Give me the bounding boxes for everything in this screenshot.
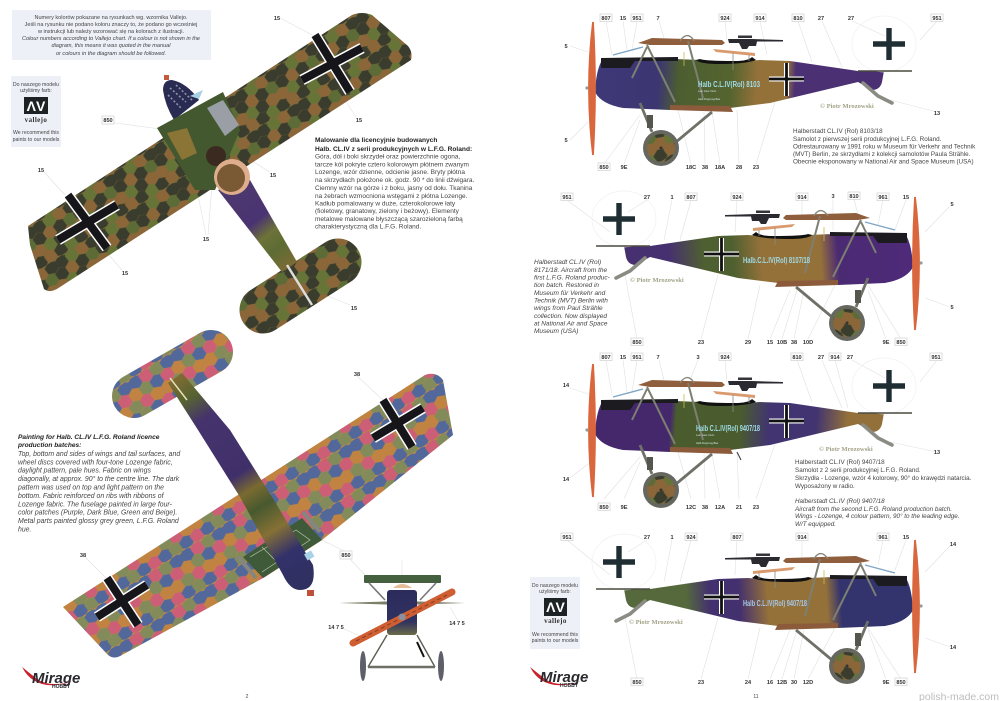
caption 9407/18: Aircraft from the second L.F.G. Roland production batch.: [794, 506, 952, 513]
caption 9407/18: Skrzydła - Lozenge, wzór 4 kolorowy, 90° do krawędzi natarcia.: [795, 474, 972, 482]
vallejo recommendation panel: paints to our models: [13, 137, 60, 143]
colour note panel: Numery kolorów pokazane na rysunkach wg. wzornika Vallejo.: [34, 15, 188, 21]
side view 2 colour labels: 914: [797, 195, 808, 201]
side view 4 colour labels: 12D: [803, 680, 813, 686]
fuselage: [218, 180, 297, 272]
side view 2 colour labels: 5: [950, 305, 954, 311]
english painting text: diagonally, at approx. 90° to the centre line. The dark: [18, 475, 180, 483]
page number right: 11: [753, 694, 759, 700]
english painting text: [17, 434, 181, 534]
top view colour labels: [38, 16, 362, 312]
vallejo recommendation panel: [11, 76, 61, 147]
caption 9407/18: Halberstadt CL.IV (Rol) 9407/18: [795, 498, 885, 505]
upper wing: [28, 13, 412, 291]
side view 2 colour labels: 15: [903, 195, 909, 201]
lower wing: [63, 374, 453, 658]
front view colour labels: 14 7 5: [449, 621, 465, 627]
bottom view colour labels: 38: [80, 553, 86, 559]
side view 2 colour labels: 27: [644, 195, 650, 201]
side view 3 colour labels: 27: [847, 355, 853, 361]
side view 1 colour labels: 23: [753, 165, 759, 171]
page number left: 2: [246, 694, 249, 700]
side view 3 colour labels: 12C: [686, 505, 696, 511]
side view 2 colour labels: 1: [670, 195, 674, 201]
side view 1 colour labels: 15: [620, 16, 626, 22]
vallejo recommendation panel right: ΛV: [546, 599, 565, 615]
polish painting text: (fioletowy, granatowy, zielony i beżowy). Elementy: [315, 208, 460, 215]
colour note panel: Colour numbers according to Vallejo chart. If a colour is not shown in the: [22, 36, 200, 42]
colour note panel: w instrukcji lub należy wzorować się na kolorach z ilustracji.: [37, 29, 185, 35]
side view 2 colour labels: 15: [767, 340, 773, 346]
side view 2 colour labels: 810: [849, 194, 859, 200]
polish painting text: Lozenge, wzór dzienne, odcienie jasne. Bryty płótna: [315, 169, 465, 176]
engine cowling: [163, 75, 203, 120]
vallejo recommendation panel: We recommend this: [13, 130, 59, 136]
bottom view colour labels: [80, 372, 360, 559]
side view 3: 9407/18: Halb.Flugzeug-Bau: [696, 441, 719, 445]
top view plane: dark lozenge: [28, 13, 412, 310]
side view 2 colour labels: [561, 192, 954, 346]
vallejo recommendation panel: Do naszego modelu: [13, 82, 59, 88]
side view 4 colour labels: 15: [903, 535, 909, 541]
top view colour labels: 15: [356, 118, 362, 124]
side view 1 colour labels: 27: [818, 16, 824, 22]
side view 2 colour labels: 29: [745, 340, 751, 346]
side view 2 colour labels: 23: [698, 340, 704, 346]
vallejo recommendation panel right: paints to our models: [532, 638, 579, 644]
english painting text: Lozenge fabric. The fuselage painted in large four-: [18, 502, 173, 508]
polish painting text: na żebrach wzmocniona wstęgami z płótna Lozenge.: [315, 193, 468, 200]
side view 4: 9407/18: [567, 534, 950, 684]
side view 1 colour labels: 38: [702, 165, 708, 171]
side view 3 colour labels: 9E: [621, 505, 628, 511]
polish painting text: Malowanie dla licencyjnie budowanych: [315, 137, 437, 144]
caption 8171/18: Technik (MVT) Berlin with: [534, 298, 608, 304]
side view 3 colour labels: 7: [656, 355, 660, 361]
side view 1: 8103/18: Halb.Flugzeug-Bau: [698, 97, 721, 101]
side view 1 colour labels: 18C: [686, 165, 696, 171]
side view 2 colour labels: 807: [686, 195, 696, 201]
side view 3 colour labels: 23: [753, 505, 759, 511]
side view 4 colour labels: 807: [732, 535, 742, 541]
vallejo recommendation panel right: vallejo: [544, 617, 567, 625]
caption 8171/18: [534, 259, 611, 335]
caption 8103/18: [793, 128, 976, 166]
side view 1 colour labels: 5: [564, 138, 568, 144]
side view 4 colour labels: 23: [698, 680, 704, 686]
caption 9407/18: Wyposażony w radio.: [795, 483, 855, 490]
caption 8171/18: first L.F.G. Roland produc-: [534, 274, 611, 282]
side view 1 colour labels: 924: [720, 16, 731, 22]
side view 4 colour labels: 30: [791, 680, 797, 686]
side view 4 colour labels: 914: [797, 535, 808, 541]
top view colour labels: 15: [203, 237, 209, 243]
tailplane: [263, 262, 338, 310]
centre section: [243, 518, 322, 578]
side view 1: 8103/18: Halb C.L.IV(Rol) 8103: [698, 80, 760, 89]
side view 3 colour labels: 807: [601, 355, 611, 361]
side view 1 colour labels: [564, 14, 943, 171]
side view 1 colour labels: 5: [564, 44, 568, 50]
caption 8103/18: Halberstadt CL.IV (Rol) 8103/18: [793, 128, 883, 135]
english painting text: pattern was used on top and light pattern on the: [17, 484, 164, 492]
side view 4 colour labels: 924: [686, 535, 697, 541]
side view 4 colour labels: 27: [644, 535, 650, 541]
fuselage: [168, 373, 314, 590]
polish painting text: na skrzydłach położone ok. godz. 90 * do linii dźwigara.: [315, 177, 475, 184]
side view 3 colour labels: 27: [818, 355, 824, 361]
vallejo recommendation panel right: Do naszego modelu: [532, 583, 578, 589]
front view colour labels: [328, 621, 465, 631]
caption 8103/18: (MVT) Berlin, ze skrzydłami z kolekcji samolotów Paula Strähle.: [793, 151, 971, 158]
side view 3 colour labels: 951: [632, 355, 642, 361]
mirage logo right: Mirage: [540, 669, 588, 686]
side view 3 colour labels: 850: [599, 505, 609, 511]
caption 9407/18: Samolot z 2 serii produkcyjnej L.F.G. Roland.: [795, 467, 921, 474]
side view 2: 8171/18: © Piotr Mrozowski: [630, 277, 684, 284]
wing crosses: [58, 35, 362, 248]
side view 2: 8171/18: [567, 191, 950, 341]
side view 4 colour labels: 1: [670, 535, 674, 541]
side view 3: 9407/18: Leer Gew. Nutz.: [696, 433, 715, 437]
vallejo recommendation panel: użyliśmy farb:: [20, 88, 52, 94]
side view 4: 9407/18: © Piotr Mrozowski: [629, 619, 683, 626]
side view 4 colour labels: 951: [562, 535, 572, 541]
english painting text: daylight pattern, pale hues. Fabric on wings: [18, 468, 151, 474]
side view 3: 9407/18: [570, 358, 937, 508]
side view 4 colour labels: 12B: [777, 680, 787, 686]
side view 2 colour labels: 9E: [883, 340, 890, 346]
top view colour labels: 15: [351, 306, 357, 312]
english painting text: Metal parts painted glossy grey green, L.F.G. Roland: [18, 518, 180, 525]
side view 3 colour labels: 14: [563, 477, 570, 483]
side view 4 colour labels: 14: [950, 542, 957, 548]
vallejo recommendation panel right: użyliśmy farb:: [539, 589, 571, 595]
side view 2 colour labels: 850: [632, 340, 642, 346]
bottom view colour labels: 850: [341, 553, 351, 559]
side view 2 colour labels: 850: [896, 340, 906, 346]
side view 1 colour labels: 951: [632, 16, 642, 22]
english painting text: Painting for Halb. CL.IV L.F.G. Roland licence: [18, 434, 160, 441]
centre section: [157, 92, 240, 190]
caption 8103/18: Odrestaurowany w 1991 roku w Museum für Verkehr and Technik: [793, 144, 976, 150]
mirage logo left: [22, 667, 80, 690]
side view 3 colour labels: 810: [792, 355, 802, 361]
tailplane: [134, 352, 211, 396]
colour note panel: [12, 10, 211, 60]
english painting text: production batches:: [17, 442, 81, 449]
front view colour labels: 14 7 5: [328, 625, 344, 631]
side view 1: 8103/18: © Piotr Mrozowski: [820, 103, 874, 110]
mirage logo right: HOBBY: [560, 683, 579, 689]
english painting text: color patches (Purple, Dark Blue, Green and Beige).: [18, 510, 177, 516]
side view 4: 9407/18: Halb C.L.IV(Rol) 9407/18: [743, 599, 807, 608]
caption 8171/18: collection. Now displayed: [534, 313, 607, 320]
side view 1 colour labels: 18A: [715, 165, 725, 171]
side view 2: 8171/18: Halb.C.L.IV(Rol) 8107/18: [743, 256, 810, 265]
caption 8171/18: Museum (USA): [534, 328, 578, 335]
side view 1 colour labels: 807: [601, 16, 611, 22]
side view 4 colour labels: 24: [745, 680, 752, 686]
side view 2 colour labels: 951: [562, 195, 572, 201]
caption 8171/18: Museum für Verkehr and: [534, 290, 606, 297]
side view 3: 9407/18: © Piotr Mrozowski: [819, 446, 873, 453]
polish painting text: Góra, dół i boki skrzydeł oraz powierzchnie ogona,: [315, 154, 460, 160]
side view 1: 8103/18: Leer Gew. Nutz.: [698, 89, 717, 93]
vallejo recommendation panel right: We recommend this: [532, 632, 578, 638]
side view 3 colour labels: 38: [702, 505, 708, 511]
side view 1 colour labels: 28: [736, 165, 742, 171]
bottom view colour labels: 38: [354, 372, 360, 378]
top view colour labels: 850: [103, 118, 113, 124]
side view 3 colour labels: 21: [736, 505, 742, 511]
side view 3 colour labels: 951: [931, 355, 941, 361]
side view 3 colour labels: 914: [830, 355, 841, 361]
side view 2 colour labels: 38: [791, 340, 797, 346]
polish painting text: [315, 137, 475, 230]
polish painting text: Kadłub pomalowany w duże, czterokolorowe łaty: [315, 200, 456, 208]
polish painting text: tarcze kół pokryte cztero kolorowym płótnem zwanym: [315, 162, 469, 168]
side view 2 colour labels: 3: [831, 194, 835, 200]
front view plane: [339, 558, 465, 681]
top view colour labels: 15: [38, 168, 44, 174]
side view 4 colour labels: 14: [950, 645, 957, 651]
side view 3 colour labels: 13: [934, 450, 940, 456]
wing crosses: [97, 400, 423, 625]
caption 9407/18: Wings - Lozenge, 4 colour pattern, 90° to the leading edge.: [795, 512, 960, 520]
side view 3 colour labels: 924: [720, 355, 731, 361]
mirage logo left: HOBBY: [52, 684, 71, 690]
vallejo recommendation panel: vallejo: [25, 116, 47, 124]
side view 1 colour labels: 7: [656, 16, 660, 22]
caption 8171/18: Halberstadt CL.IV (Rol): [534, 259, 601, 266]
polish painting text: charakterystyczną dla L.F.G. Roland.: [315, 224, 421, 230]
side view 3: 9407/18: Halb C.L.IV(Rol) 9407/18: [696, 424, 760, 433]
side view 4 colour labels: 961: [878, 535, 888, 541]
side view 2 colour labels: 961: [878, 195, 888, 201]
cockpit: [206, 146, 226, 166]
top view colour labels: 15: [122, 271, 128, 277]
side view 1 colour labels: 27: [848, 16, 854, 22]
side view 2 colour labels: 5: [950, 202, 954, 208]
colour note panel: or colours in the diagram should be followed.: [56, 51, 166, 57]
side view 3 colour labels: 15: [620, 355, 626, 361]
caption 8171/18: at National Air and Space: [534, 320, 608, 328]
caption 8103/18: Obecnie eksponowany w National Air and Space Museum (USA): [793, 158, 974, 166]
mirage logo left: Mirage: [32, 670, 80, 687]
caption 8103/18: Samolot z pierwszej serii produkcyjnej L.F.G. Roland.: [793, 136, 942, 143]
bottom view plane: pale lozenge: [63, 352, 453, 658]
side view 4 colour labels: 9E: [883, 680, 890, 686]
side view 2 colour labels: 10B: [777, 340, 787, 346]
caption 8171/18: wings from Paul Strähle: [534, 305, 603, 312]
side view 1 colour labels: 850: [599, 165, 609, 171]
caption 9407/18: Halberstadt CL.IV (Rol) 9407/18: [795, 459, 885, 466]
side view 4 colour labels: 850: [632, 680, 642, 686]
top view colour labels: 15: [274, 16, 280, 22]
vallejo recommendation panel right: [530, 577, 580, 649]
caption 9407/18: W/T equipped.: [795, 521, 836, 528]
vallejo recommendation panel: ΛV: [27, 98, 46, 114]
mirage logo right: [530, 667, 588, 689]
side view 3 colour labels: 12A: [715, 505, 725, 511]
side view 3 colour labels: [563, 353, 942, 511]
polish painting text: metalowe malowane błyszczącą szarozieloną farbą: [315, 216, 463, 223]
side view 3 colour labels: 14: [563, 383, 570, 389]
side view 3 colour labels: 3: [696, 355, 700, 361]
side view 4 colour labels: 850: [896, 680, 906, 686]
caption 8171/18: tion batch. Restored in: [534, 282, 599, 289]
side view 1: 8103/18: [570, 16, 937, 166]
english painting text: hue.: [18, 526, 31, 534]
side view 1 colour labels: 13: [934, 111, 940, 117]
top view colour labels: 15: [270, 173, 276, 179]
side view 2 colour labels: 10D: [803, 340, 813, 346]
caption 9407/18: [794, 459, 972, 528]
side view 2 colour labels: 924: [732, 195, 743, 201]
side view 1 colour labels: 9E: [621, 165, 628, 171]
colour note panel: Jeśli na rysunku nie podano koloru znaczy to, że podano go wcześniej: [25, 22, 197, 28]
polish painting text: Ciemny wzór na górze i z boku, jasny od dołu. Tkanina: [315, 185, 473, 192]
side view 1 colour labels: 914: [755, 16, 766, 22]
english painting text: bottom. Fabric reinforced on ribs with ribbons of: [18, 493, 165, 500]
caption 8171/18: 8171/18. Aircraft from the: [534, 267, 607, 274]
english painting text: Top, bottom and sides of wings and tail surfaces, and: [18, 451, 181, 458]
colour note panel: diagram, this means it was quoted in the manual: [51, 43, 171, 49]
polish painting text: Halb. CL.IV z serii produkcyjnych w L.F.G. Roland:: [315, 146, 472, 153]
side view 4 colour labels: [561, 533, 957, 686]
english painting text: wheel discs covered with four-tone Lozenge fabric,: [18, 460, 173, 466]
side view 1 colour labels: 951: [932, 16, 942, 22]
side view 4 colour labels: 16: [767, 680, 773, 686]
side view 1 colour labels: 810: [793, 16, 803, 22]
